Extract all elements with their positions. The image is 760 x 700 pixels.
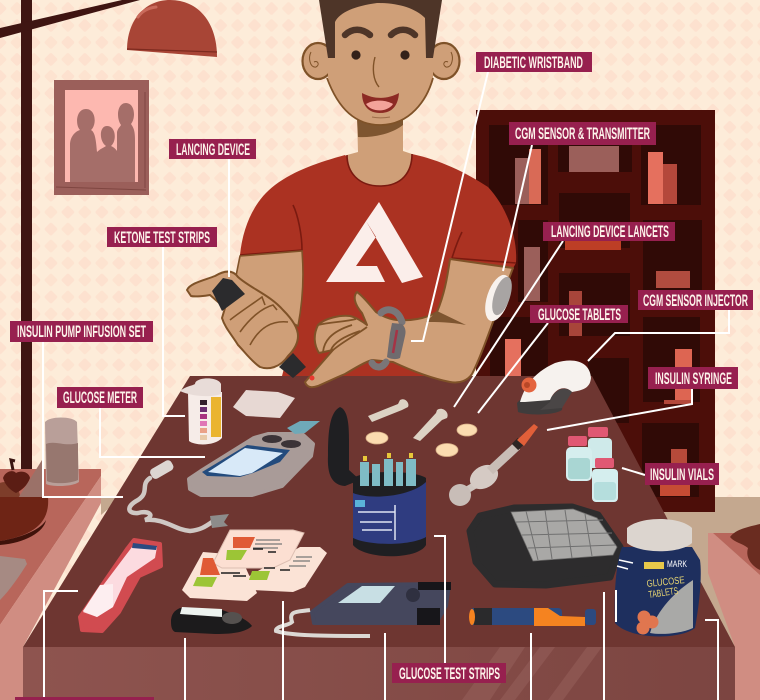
- lancing device tip: [279, 353, 306, 378]
- lamp pole and beam: [0, 0, 140, 475]
- mouth: [362, 93, 399, 113]
- glucose tablets jar: MARK: [667, 559, 687, 569]
- test strip bottle: [180, 378, 222, 444]
- right arm: [305, 259, 513, 387]
- glucose test strip cards: [182, 530, 327, 601]
- label: ketone test strips: KETONE TEST STRIPS: [114, 228, 210, 247]
- glucose tablets jar: GLUCOSE: [646, 575, 685, 590]
- bookshelf: [476, 110, 715, 512]
- glucose tablets jar: [615, 519, 701, 636]
- eyebrows: [345, 30, 415, 35]
- wristband: [372, 310, 406, 367]
- label: lancing device: LANCING DEVICE: [176, 140, 250, 159]
- insulin syringe: [449, 424, 538, 506]
- shirt torso and sleeves: [240, 154, 516, 376]
- right counter: [708, 533, 760, 700]
- label: glucose tablets: GLUCOSE TABLETS: [538, 305, 621, 324]
- label: cgm sensor and transmitter: [509, 122, 656, 145]
- face: [328, 0, 433, 125]
- neck shadow: [357, 118, 403, 137]
- label: diabetic wristband: [476, 52, 592, 72]
- label: glucose tablets: [530, 305, 628, 324]
- label: cropped bottom label: [15, 697, 154, 700]
- left ear: [302, 43, 334, 79]
- CGM sensor on arm: [480, 272, 516, 324]
- shirt logo: [326, 202, 423, 283]
- right ear: [428, 43, 460, 79]
- label: glucose meter: [57, 387, 143, 408]
- label: glucose test strips: [392, 663, 506, 683]
- insulin pump with tubing: [276, 582, 451, 636]
- left hand: [187, 272, 298, 368]
- finger prick: [310, 376, 314, 380]
- arm fold shadow: [426, 311, 466, 325]
- floor: [660, 497, 760, 700]
- label: ketone test strips: [107, 227, 217, 247]
- insulin pen: [469, 608, 596, 626]
- black sensor reader: [171, 607, 252, 634]
- label: lancing device: [169, 139, 256, 159]
- label: glucose meter: GLUCOSE METER: [63, 388, 137, 407]
- fingers: [318, 319, 367, 352]
- lancets on table: [368, 399, 448, 441]
- neck: [347, 115, 412, 186]
- sleeve folds: [240, 205, 516, 263]
- label: insulin pump infusion set: [10, 321, 153, 342]
- label: diabetic wristband: DIABETIC WRISTBAND: [484, 53, 583, 72]
- insulin vials: [566, 427, 618, 502]
- label: lancing device lancets: [543, 222, 675, 241]
- left counter: [0, 469, 101, 700]
- table top: [23, 376, 735, 647]
- sensor injector: [517, 361, 591, 414]
- label: insulin vials: [645, 463, 719, 485]
- jaw line: [327, 78, 433, 125]
- glass of water: [45, 418, 79, 486]
- insulin pump carrying case: [470, 507, 620, 585]
- insulin pump: [80, 540, 161, 631]
- label: insulin syringe: [648, 367, 738, 389]
- glucose meter: [189, 421, 320, 495]
- family picture frame: [54, 80, 149, 195]
- label: insulin pump infusion set: INSULIN PUMP INFUSION SET: [17, 322, 146, 341]
- infusion set tubing: [129, 459, 229, 531]
- left floor patch: [101, 497, 122, 515]
- glucose tablets on table: [366, 424, 477, 456]
- glucose tablets jar: TABLETS: [648, 586, 679, 601]
- gauze squares: [233, 390, 295, 418]
- table front: [23, 647, 735, 700]
- lamp shade: [127, 0, 217, 57]
- eyes: [351, 50, 410, 60]
- left upper arm: [236, 251, 303, 326]
- table front reflections: [462, 647, 602, 700]
- collar outline: [347, 154, 412, 186]
- label: glucose test strips: GLUCOSE TEST STRIPS: [399, 664, 500, 683]
- lancing device: [212, 278, 245, 311]
- chin mark: [372, 116, 390, 119]
- plant on right counter: [730, 524, 760, 570]
- fruit bowl: [0, 460, 48, 545]
- nose: [373, 57, 379, 87]
- knuckle lines: [230, 297, 288, 345]
- hair: [319, 0, 442, 58]
- lancet box: [328, 407, 426, 556]
- person: [187, 0, 516, 387]
